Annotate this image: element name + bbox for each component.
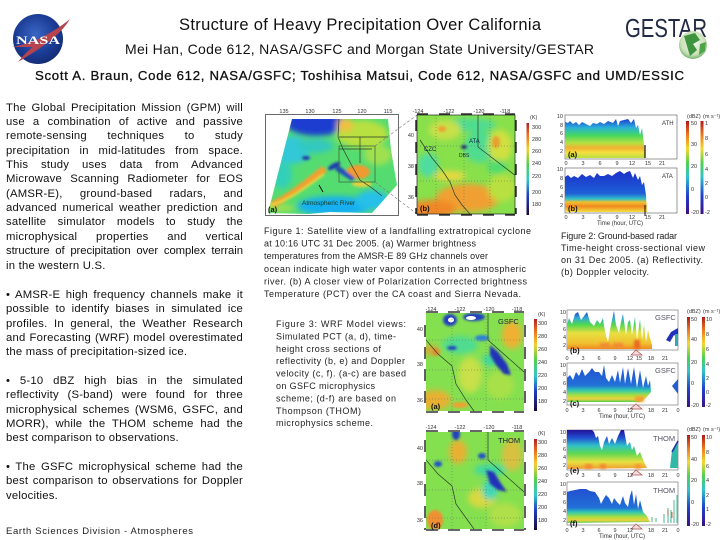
caption: figure 3: on GSFC microphysics <box>276 381 376 391</box>
radar panel (b): Doppler velocity: 9 <box>615 215 619 221</box>
panel (f): THOM Doppler velocity: 2 <box>563 518 566 524</box>
panel (c): GSFC Doppler velocity: 2 <box>563 399 566 405</box>
panel (f): THOM Doppler velocity: 6 <box>597 528 601 534</box>
panel (f): THOM Doppler velocity: (f) <box>570 519 578 528</box>
text block: introduction and bullets: reflectivity (S-band) were found for three <box>6 389 243 401</box>
map (a): AMSR-E brightness temperature: 130 <box>305 109 315 115</box>
panel (e): THOM reflectivity: 18 <box>648 473 654 479</box>
caption: figure 1: at 10:16 UTC 31 Dec 2005. (a) Warmer brightness <box>264 239 476 249</box>
panel (f): THOM Doppler velocity: THOM <box>653 486 675 495</box>
label: (a): (a) <box>268 205 278 214</box>
panel (b): GSFC reflectivity: GSFC <box>655 313 676 322</box>
panel (f): THOM Doppler velocity: Time (hour, UTC) <box>599 534 645 540</box>
map (d): THOM simulated PCT: THOM <box>498 436 520 445</box>
caption: figure 2: on 31 Dec 2005. (a) Reflectivity. <box>561 255 703 265</box>
text block: introduction and bullets: profiles. In general, the Weather Research <box>6 318 243 330</box>
caption: figure 3: microphysics scheme. <box>276 418 373 428</box>
caption: figure 1: temperatures from the AMSR-E 89 GHz channels over <box>264 251 488 261</box>
color bars: reflectivity and velocity: 20 <box>691 164 697 170</box>
radar panel (a): reflectivity: 3 <box>581 161 585 167</box>
panel (b): GSFC reflectivity: 8 <box>563 319 566 325</box>
text block: introduction and bullets: structure of precipitation over complex terrain <box>6 245 243 257</box>
color bars: reflectivity and velocity: 1 <box>705 121 708 127</box>
text block: introduction and bullets: MORR), while the THOM scheme had the <box>6 418 243 430</box>
map (a): AMSR-E brightness temperature: 135 <box>279 109 289 115</box>
color bar: map (d): 200 <box>538 505 547 511</box>
map (a): AMSR-E brightness temperature <box>262 109 402 218</box>
color bars: GSFC panels: 2 <box>706 376 709 382</box>
radar panel (b): Doppler velocity: 0 <box>564 215 568 221</box>
panel (e): THOM reflectivity: 6 <box>597 473 601 479</box>
color bars: GSFC panels: 40 <box>691 337 697 343</box>
map (b): closer view of PCT: DBS <box>459 153 470 159</box>
caption: figure 1: river. (b) A closer view of Polarization Corrected brightness <box>264 276 528 286</box>
radar panel (a): reflectivity: 15 <box>645 161 651 167</box>
panel (c): GSFC Doppler velocity: 8 <box>563 372 566 378</box>
map (a): GSFC simulated PCT: GSFC <box>498 317 519 326</box>
radar panel (a): reflectivity: 6 <box>560 131 563 137</box>
text block: introduction and bullets: remote-sensing techniques to study <box>6 130 243 142</box>
color bar: brightness temperature: 260 <box>532 149 541 155</box>
color bars: GSFC panels: 10 <box>706 317 712 323</box>
icon: GESTAR logo <box>625 13 707 59</box>
caption: figure 3: Simulated PCT (a, d), time- <box>276 331 396 341</box>
map (b): closer view of PCT: -120 <box>473 109 485 115</box>
radar panel (b): Doppler velocity: 10 <box>557 167 563 173</box>
radar panel (b): Doppler velocity: 3 <box>581 215 585 221</box>
figure 2: ground-based radar panels <box>557 114 720 227</box>
panel (c): GSFC Doppler velocity: 0 <box>676 408 680 414</box>
panel (e): THOM reflectivity: 10 <box>560 430 566 436</box>
panel (b): GSFC reflectivity: 18 <box>648 356 654 362</box>
color bar: brightness temperature: 220 <box>532 174 541 180</box>
color bars: reflectivity and velocity: 30 <box>691 142 697 148</box>
color bars: reflectivity and velocity: 8 <box>705 136 708 142</box>
color bars: reflectivity and velocity: 0 <box>691 187 694 193</box>
color bars: reflectivity and velocity: 50 <box>691 121 697 127</box>
color bars: THOM panels: 10 <box>706 435 712 441</box>
panel (f): THOM Doppler velocity: 4 <box>563 509 566 515</box>
color bars: THOM panels: 8 <box>706 450 709 456</box>
panel (c): GSFC Doppler velocity: 12 <box>627 408 633 414</box>
caption: figure 3: Figure 3: WRF Model views: <box>276 319 406 329</box>
text block: introduction and bullets: best comparison to observations for Doppler <box>6 475 243 487</box>
text block: introduction and bullets: the mass of precipitation-sized ice. <box>6 346 187 358</box>
color bar: map (d): 220 <box>538 492 547 498</box>
radar panel (b): Doppler velocity: ATA <box>662 174 673 180</box>
color bars: THOM panels: 6 <box>706 464 709 470</box>
caption: figure 2: Figure 2: Ground-based radar <box>561 231 677 241</box>
panel (f): THOM Doppler velocity: 10 <box>560 482 566 488</box>
radar panel (a): reflectivity: 12 <box>629 161 635 167</box>
text block: introduction and bullets <box>6 102 243 502</box>
color bars: GSFC panels: 0 <box>706 390 709 396</box>
panel (f): THOM Doppler velocity <box>560 482 680 540</box>
color bars: THOM panels: 40 <box>691 457 697 463</box>
text block: introduction and bullets: • The GSFC microphysical scheme had the <box>6 461 243 473</box>
caption: figure 3: reflectivity (b, e) and Doppler <box>276 356 405 366</box>
panel (f): THOM Doppler velocity: 0 <box>565 528 569 534</box>
panel (e): THOM reflectivity: 0 <box>676 473 680 479</box>
text block: introduction and bullets: use a combination of active and passive <box>6 116 243 128</box>
panel (f): THOM Doppler velocity: 8 <box>563 491 566 497</box>
caption: figure 1: Figure 1: Satellite view of a landfalling extratropical cyclone <box>264 226 531 236</box>
panel (b): GSFC reflectivity: 2 <box>563 343 566 349</box>
color bars: reflectivity and velocity: 2 <box>705 181 708 187</box>
color bars: THOM panels: 0 <box>691 500 694 506</box>
color bar: map (a): 280 <box>538 334 547 340</box>
radar panel (a): reflectivity: 6 <box>598 161 602 167</box>
radar panel (a): reflectivity: 9 <box>615 161 619 167</box>
text block: introduction and bullets: • AMSR-E high frequency channels make it <box>6 289 243 301</box>
panel (e): THOM reflectivity: THOM <box>653 434 675 443</box>
caption: figure 3 <box>276 319 406 428</box>
radar panel (b): Doppler velocity: 6 <box>560 185 563 191</box>
label: atmospheric river: Atmospheric River <box>302 200 356 207</box>
panel (b): GSFC reflectivity: 9 <box>613 356 617 362</box>
caption: figure 1 <box>264 226 531 299</box>
color bars: reflectivity and velocity: -20 <box>691 210 699 216</box>
map (a): GSFC simulated PCT: -124 <box>425 307 437 313</box>
color bar: brightness temperature: 180 <box>532 202 541 208</box>
text block: introduction and bullets: and Forecasting (WRF) model overestimated <box>6 332 243 344</box>
map (a): GSFC simulated PCT: -120 <box>483 307 495 313</box>
color bar: brightness temperature: 240 <box>532 161 541 167</box>
radar panel (b): Doppler velocity: 21 <box>659 215 665 221</box>
panel (e): THOM reflectivity: 9 <box>613 473 617 479</box>
map (b): closer view of PCT: -118 <box>500 109 510 115</box>
color bar: map (a): (K) <box>538 312 546 318</box>
radar panel (a): reflectivity: (a) <box>568 150 578 159</box>
color bar: map (d): 180 <box>538 518 547 524</box>
icon: NASA logo <box>12 14 70 64</box>
radar panel (a): reflectivity: 2 <box>560 149 563 155</box>
color bars: GSFC panels: 50 <box>691 317 697 323</box>
panel (f): THOM Doppler velocity: 21 <box>662 528 668 534</box>
caption: figure 2: (b) Doppler velocity. <box>561 267 649 277</box>
color bars: THOM panels: 4 <box>706 478 709 484</box>
map (d): THOM simulated PCT: 36 <box>417 518 423 524</box>
panel (c): GSFC Doppler velocity: (c) <box>570 399 580 408</box>
map (d): THOM simulated PCT: -118 <box>512 425 522 431</box>
color bar: map (d): 300 <box>538 440 547 446</box>
authors line 2: Scott A. Braun, Code 612, NASA/GSFC; Toshihisa Matsui, Code 612, NASA/GSFC and UMD/ESSIC <box>35 68 684 83</box>
color bars: THOM panels: (dBZ) <box>687 427 701 433</box>
panel (b): GSFC reflectivity: 3 <box>581 356 585 362</box>
text block: introduction and bullets: advanced numerical weather prediction and <box>6 202 243 214</box>
color bar: map (a) <box>534 312 547 411</box>
color bars: GSFC panels: 0 <box>691 381 694 387</box>
text block: introduction and bullets: in the western U.S. <box>6 260 106 272</box>
map (a): GSFC simulated PCT: (a) <box>431 402 441 411</box>
radar panel (b): Doppler velocity: 4 <box>560 194 563 200</box>
panel (e): THOM reflectivity <box>560 430 680 479</box>
caption: figure 2 <box>561 231 706 277</box>
text block: introduction and bullets: possible to identify biases in simulated ice <box>6 303 243 315</box>
color bar: map (a): 220 <box>538 373 547 379</box>
color bars: THOM panels: 20 <box>691 478 697 484</box>
radar panel (b): Doppler velocity: Time (hour, UTC) <box>597 221 643 227</box>
panel (c): GSFC Doppler velocity: 6 <box>563 381 566 387</box>
text block: introduction and bullets: satellite simulator models to study the <box>6 216 243 228</box>
color bars: GSFC panels <box>687 309 720 409</box>
panel (b): GSFC reflectivity: 12 <box>627 356 633 362</box>
radar panel (a): reflectivity: ATH <box>662 121 674 127</box>
radar panel (b): Doppler velocity: 12 <box>629 215 635 221</box>
radar panel (a): reflectivity: 21 <box>659 161 665 167</box>
color bars: GSFC panels: -2 <box>706 403 711 409</box>
panel (b): GSFC reflectivity <box>560 310 678 362</box>
panel (c): GSFC Doppler velocity: 0 <box>565 408 569 414</box>
map (b): closer view of PCT: CZC <box>424 147 437 153</box>
panel (e): THOM reflectivity: 21 <box>662 473 668 479</box>
panel (c): GSFC Doppler velocity: GSFC <box>655 366 676 375</box>
color bar: brightness temperature: 280 <box>532 137 541 143</box>
map (d): THOM simulated PCT: -124 <box>425 425 437 431</box>
text block: introduction and bullets: microphysical properties and vertical <box>6 231 243 243</box>
map (a): GSFC simulated PCT: -122 <box>454 307 466 313</box>
text block: introduction and bullets: This study uses data from Advanced <box>6 159 243 171</box>
color bar: map (a): 260 <box>538 347 547 353</box>
caption: figure 3: height cross sections of <box>276 344 381 354</box>
color bars: THOM panels: -20 <box>691 522 699 528</box>
connector lines <box>375 115 417 214</box>
color bars: THOM panels: 2 <box>706 493 709 499</box>
color bar: map (a): 180 <box>538 399 547 405</box>
color bars: THOM panels <box>687 427 720 528</box>
radar panel (a): reflectivity: 0 <box>564 161 568 167</box>
panel (c): GSFC Doppler velocity: 3 <box>581 408 585 414</box>
text block: introduction and bullets: Microwave Scanning Radiometer for EOS <box>6 173 243 185</box>
color bar: map (d): (K) <box>538 431 546 437</box>
caption: figure 2: Time-height cross-sectional view <box>561 243 706 253</box>
color bars: reflectivity and velocity: 6 <box>705 152 708 158</box>
panel (e): THOM reflectivity: 12 <box>627 473 633 479</box>
radar panel (a): reflectivity: 10 <box>557 114 563 120</box>
map (a): GSFC simulated PCT: 36 <box>417 398 423 404</box>
text block: introduction and bullets: The Global Precipitation Mission (GPM) will <box>6 102 243 114</box>
map (a): GSFC simulated PCT: -118 <box>512 307 522 313</box>
text block: introduction and bullets: (AMSR-E), ground-based radars, and <box>6 188 243 200</box>
panel (f): THOM Doppler velocity: 9 <box>613 528 617 534</box>
map (b): closer view of PCT: 38 <box>408 164 414 170</box>
panel (c): GSFC Doppler velocity: 21 <box>662 408 668 414</box>
panel (f): THOM Doppler velocity: 3 <box>581 528 585 534</box>
color bars: reflectivity and velocity: 4 <box>705 167 708 173</box>
color bars: reflectivity and velocity: (dBZ) <box>687 114 701 120</box>
color bars: reflectivity and velocity <box>686 114 720 216</box>
caption: figure 3: velocity (c, f). (a-c) are based <box>276 369 406 379</box>
color bar: brightness temperature: (K) <box>530 115 538 121</box>
map (a): GSFC simulated PCT <box>417 307 525 412</box>
color bars: GSFC panels: (m s⁻¹) <box>703 309 720 315</box>
panel (e): THOM reflectivity: 2 <box>563 463 566 469</box>
panel (c): GSFC Doppler velocity: 6 <box>597 408 601 414</box>
color bar: map (d): 280 <box>538 453 547 459</box>
text block: introduction and bullets: microphysical schemes (WSM6, GSFC, and <box>6 404 243 416</box>
color bar: map (d) <box>534 431 547 530</box>
color bars: GSFC panels: 8 <box>706 332 709 338</box>
panel (e): THOM reflectivity: (e) <box>570 466 580 475</box>
panel (e): THOM reflectivity: 4 <box>563 455 566 461</box>
radar panel (b): Doppler velocity: 15 <box>645 215 651 221</box>
color bars: reflectivity and velocity: 0 <box>705 195 708 201</box>
title: Structure of Heavy Precipitation Over California <box>179 16 542 34</box>
color bars: GSFC panels: (dBZ) <box>687 309 701 315</box>
caption: figure 3: scheme; (d-f) are based on <box>276 393 396 403</box>
map (d): THOM simulated PCT: (d) <box>431 521 441 530</box>
panel (f): THOM Doppler velocity: 18 <box>648 528 654 534</box>
authors line 1: Mei Han, Code 612, NASA/GSFC and Morgan State University/GESTAR <box>125 41 594 57</box>
map (d): THOM simulated PCT: 38 <box>417 481 423 487</box>
caption: figure 1: Temperature (PCT) over the CA coast and Sierra Nevada. <box>264 289 521 299</box>
map (d): THOM simulated PCT: -120 <box>483 425 495 431</box>
map (b): closer view of PCT: ATA <box>469 139 480 145</box>
color bars: GSFC panels: 6 <box>706 347 709 353</box>
panel (c): GSFC Doppler velocity: 10 <box>560 363 566 369</box>
map (b): closer view of PCT <box>408 109 516 218</box>
color bars: GSFC panels: 4 <box>706 362 709 368</box>
figure 3: time-height panels <box>560 309 720 540</box>
panel (b): GSFC reflectivity: 6 <box>597 356 601 362</box>
color bars: reflectivity and velocity: (m s⁻¹) <box>703 114 720 120</box>
panel (f): THOM Doppler velocity: 6 <box>563 500 566 506</box>
color bar: map (a): 300 <box>538 321 547 327</box>
panel (c): GSFC Doppler velocity: 4 <box>563 390 566 396</box>
color bar: map (d): 260 <box>538 466 547 472</box>
map (a): AMSR-E brightness temperature: 125 <box>332 109 342 115</box>
panel (c): GSFC Doppler velocity: 18 <box>648 408 654 414</box>
color bar: map (a): 240 <box>538 360 547 366</box>
radar panel (b): Doppler velocity <box>557 167 677 227</box>
map (d): THOM simulated PCT: 40 <box>417 446 423 452</box>
color bars: THOM panels: 1 <box>706 507 709 513</box>
color bar: map (d): 240 <box>538 479 547 485</box>
map (a): AMSR-E brightness temperature: 120 <box>357 109 367 115</box>
radar panel (a): reflectivity: 8 <box>560 123 563 129</box>
map (d): THOM simulated PCT <box>417 425 525 530</box>
color bar: map (a): 200 <box>538 386 547 392</box>
panel (c): GSFC Doppler velocity <box>560 363 680 420</box>
radar panel (a): reflectivity: 4 <box>560 140 563 146</box>
color bars: reflectivity and velocity: -2 <box>705 210 710 216</box>
panel (e): THOM reflectivity: 0 <box>565 473 569 479</box>
footer: Earth Sciences Division - Atmospheres <box>6 526 193 537</box>
map (b): closer view of PCT: 36 <box>408 195 414 201</box>
panel (e): THOM reflectivity: 3 <box>581 473 585 479</box>
panel (b): GSFC reflectivity: 4 <box>563 335 566 341</box>
panel (e): THOM reflectivity: 8 <box>563 439 566 445</box>
text block: introduction and bullets: • 5-10 dBZ high bias in the simulated <box>6 375 243 387</box>
text block: introduction and bullets: precipitation in mid-latitudes from space. <box>6 144 243 156</box>
map (a): AMSR-E brightness temperature: 115 <box>384 109 392 115</box>
panel (f): THOM Doppler velocity: 12 <box>627 528 633 534</box>
panel (f): THOM Doppler velocity: 0 <box>676 528 680 534</box>
map (b): closer view of PCT: -122 <box>443 109 455 115</box>
color bars: GSFC panels: -20 <box>691 403 699 409</box>
color bar: brightness temperature: 200 <box>532 190 541 196</box>
panel (b): GSFC reflectivity: 15 <box>636 356 642 362</box>
color bar: brightness temperature: 300 <box>532 125 541 131</box>
text block: introduction and bullets: best comparison to observations. <box>6 432 179 444</box>
color bars: THOM panels: (m s⁻¹) <box>703 427 720 433</box>
label: (b): (b) <box>420 204 430 213</box>
map (d): THOM simulated PCT: -122 <box>454 425 466 431</box>
map (b): closer view of PCT: 40 <box>408 133 414 139</box>
radar panel (b): Doppler velocity: 6 <box>598 215 602 221</box>
panel (c): GSFC Doppler velocity: Time (hour, UTC) <box>599 414 645 420</box>
caption: figure 1: ocean indicate high water vapor contents in an atmospheric <box>264 264 526 274</box>
color bars: THOM panels: 50 <box>691 435 697 441</box>
icon: NASA logo: NASA <box>16 35 61 47</box>
map (b): closer view of PCT: -124 <box>412 109 424 115</box>
color bar: brightness temperature <box>526 115 541 215</box>
panel (b): GSFC reflectivity: 0 <box>565 356 569 362</box>
panel (b): GSFC reflectivity: (b) <box>570 346 580 355</box>
caption: figure 3: Thompson (THOM) <box>276 406 361 416</box>
radar panel (b): Doppler velocity: 2 <box>560 203 563 209</box>
color bars: THOM panels: -2 <box>706 522 711 528</box>
panel (e): THOM reflectivity: 6 <box>563 447 566 453</box>
radar panel (b): Doppler velocity: (b) <box>568 204 578 213</box>
panel (b): GSFC reflectivity: 6 <box>563 327 566 333</box>
figure 3: simulated PCT maps <box>417 307 547 530</box>
panel (b): GSFC reflectivity: 21 <box>662 356 668 362</box>
figure 1: satellite maps <box>262 109 541 218</box>
radar panel (a): reflectivity <box>557 114 677 167</box>
radar panel (b): Doppler velocity: 8 <box>560 176 563 182</box>
map (a): GSFC simulated PCT: 40 <box>417 327 423 333</box>
panel (b): GSFC reflectivity: 10 <box>560 310 566 316</box>
map (a): GSFC simulated PCT: 38 <box>417 362 423 368</box>
panel (c): GSFC Doppler velocity: 9 <box>613 408 617 414</box>
color bars: GSFC panels: 20 <box>691 360 697 366</box>
text block: introduction and bullets: velocities. <box>6 490 58 502</box>
